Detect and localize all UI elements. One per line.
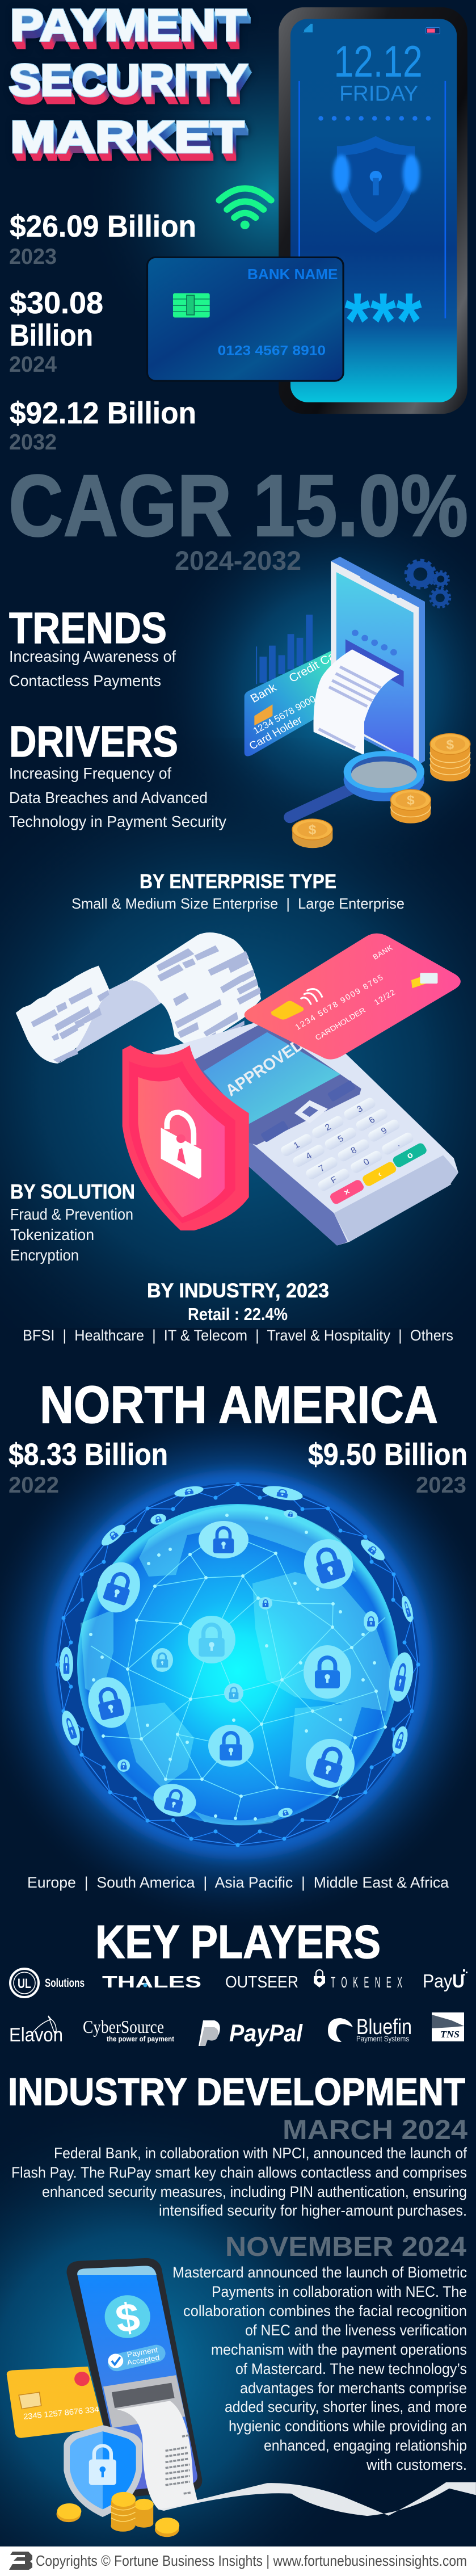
title <box>9 0 247 162</box>
bar chart <box>256 615 313 684</box>
continents <box>81 1505 393 1826</box>
by solution: Tokenization <box>10 1226 94 1243</box>
illustration: smartphone lock screen, wifi and bank card <box>147 7 467 414</box>
credit card: 1234 5678 9009 8765 <box>293 972 386 1032</box>
keypad: 5 <box>336 1134 346 1144</box>
by industry: BFSI | Healthcare | IT & Telecom | Travel & Hospitality | Others <box>23 1327 453 1344</box>
title: PAYMENT <box>10 0 246 50</box>
title: SECURITY <box>9 55 247 105</box>
network lines <box>91 1515 385 1819</box>
keypad: F <box>329 1175 339 1186</box>
keypad: 6 <box>368 1115 377 1125</box>
smartphone: $ <box>113 2295 142 2342</box>
by solution: Fraud & Prevention <box>10 1205 133 1223</box>
logo: Tokenex <box>314 1970 402 1991</box>
smartphone: Accepted <box>127 2354 160 2367</box>
shield with padlock <box>64 2425 142 2517</box>
market size stats: $30.08 <box>10 286 103 320</box>
icon: gold coins <box>57 2492 179 2537</box>
credit card: 1234 5678 9000 <box>251 694 318 736</box>
credit card: CARDHOLDER <box>314 1006 367 1042</box>
regions list: Europe | South America | Asia Pacific | Middle East & Africa <box>27 1874 449 1891</box>
logo: Tokenex: TOKENEX <box>331 1974 402 1991</box>
keypad: 2 <box>323 1122 332 1133</box>
by solution: BY SOLUTION <box>10 1180 135 1203</box>
by enterprise type: Small & Medium Size Enterprise | Large Enterprise <box>71 895 405 912</box>
title: MARKET <box>10 112 244 162</box>
market size stats: $26.09 Billion <box>10 209 196 243</box>
illustration: POS terminal, receipt, shield and card <box>16 932 461 1246</box>
keypad: o <box>405 1150 415 1161</box>
icon: wifi <box>219 188 271 229</box>
logo: UL Solutions: Solutions <box>45 1977 85 1990</box>
magnifying glass <box>290 751 424 817</box>
market size stats: 2032 <box>9 430 57 455</box>
smartphone: FRIDAY <box>339 82 418 106</box>
keypad: 4 <box>304 1151 314 1161</box>
bank card: 0123 4567 8910 <box>218 343 326 358</box>
credit card: Card Holder <box>247 713 304 752</box>
north america stats: 2023 <box>416 1473 466 1498</box>
receipt ribbon <box>158 2482 476 2516</box>
north america stats: $8.33 Billion <box>9 1438 168 1472</box>
November 2024 development: collaboration combines the facial recognition <box>183 2302 467 2319</box>
smartphone: 12.12 <box>334 37 423 86</box>
by solution: Encryption <box>10 1246 79 1264</box>
trends block <box>9 604 176 690</box>
keypad: 8 <box>349 1145 359 1156</box>
smartphone: *** <box>344 276 422 364</box>
logo: PayU: PayU <box>423 1970 465 1991</box>
trends block: TRENDS <box>9 604 167 653</box>
keypad: 1 <box>292 1140 301 1151</box>
logo: PayPal <box>199 2020 303 2047</box>
keypad: . <box>394 1139 402 1149</box>
smartphone <box>67 2258 202 2498</box>
drivers block: DRIVERS <box>9 717 178 766</box>
logo: Elavon: Elavon <box>9 2024 63 2046</box>
shield with padlock <box>123 1045 249 1230</box>
receipt <box>117 2401 198 2510</box>
receipt paper <box>16 932 261 1064</box>
bank card: BANK NAME <box>247 266 338 283</box>
drivers block: Technology in Payment Security <box>9 813 226 830</box>
POS terminal <box>151 1019 458 1246</box>
logo: Outseer: OUTSEER <box>225 1973 298 1991</box>
yellow card: 2345 1257 8676 334 <box>23 2405 99 2422</box>
illustration: payment accepted phone, card, shield, coins and receipt <box>7 2258 476 2537</box>
credit card: BANK <box>371 943 394 961</box>
illustration: isometric mobile payment <box>245 557 470 848</box>
drivers block <box>9 717 226 830</box>
logo: UL Solutions: UL <box>18 1976 31 1991</box>
November 2024 development: NOVEMBER 2024 <box>225 2232 466 2262</box>
by industry: Retail : 22.4% <box>188 1304 288 1324</box>
credit card: Credit Ca <box>287 649 338 685</box>
credit card <box>245 649 338 757</box>
logo: UL Solutions <box>10 1969 85 1997</box>
key players heading: KEY PLAYERS <box>95 1915 381 1968</box>
credit card: 12/22 <box>372 987 397 1007</box>
icon: gears <box>406 561 450 607</box>
by industry: BY INDUSTRY, 2023 <box>147 1280 329 1302</box>
keypad: × <box>342 1187 352 1197</box>
outer network shell <box>57 1484 418 1845</box>
logo: TNS <box>432 2012 464 2041</box>
smartphone <box>331 557 425 767</box>
logo: Bluefin <box>328 2015 412 2043</box>
icon: coin stacks: $ <box>446 738 454 753</box>
logo: CyberSource: the power of payment <box>107 2035 175 2043</box>
March 2024 development <box>11 2115 467 2219</box>
yellow card <box>7 2367 104 2438</box>
footer <box>0 2546 476 2576</box>
CAGR heading: 2024-2032 <box>175 545 301 575</box>
padlock nodes <box>58 1484 416 1821</box>
north america heading: NORTH AMERICA <box>40 1375 438 1434</box>
keypad: 3 <box>355 1104 365 1115</box>
bank card <box>147 257 343 381</box>
by solution <box>10 1180 135 1264</box>
by enterprise type <box>71 871 405 912</box>
keypad: ‹ <box>376 1170 384 1179</box>
keypad <box>279 1096 428 1205</box>
keypad: 7 <box>317 1163 327 1174</box>
logo: Fortune Business Insights <box>9 2552 32 2570</box>
icon: coin stacks: $ <box>407 793 415 808</box>
receipt <box>314 649 399 755</box>
icon: coin stacks <box>292 734 470 848</box>
March 2024 development: MARCH 2024 <box>283 2115 467 2145</box>
key player logos <box>9 1969 467 2047</box>
November 2024 development <box>172 2232 467 2473</box>
market size stats: Billion <box>10 318 93 352</box>
logo: Bluefin: Payment Systems <box>356 2034 409 2043</box>
north america stats: 2022 <box>9 1473 59 1498</box>
by enterprise type: BY ENTERPRISE TYPE <box>140 871 336 893</box>
icon: coin stacks: $ <box>309 823 317 838</box>
keypad: 0 <box>362 1157 372 1167</box>
November 2024 development: with customers. <box>366 2456 467 2473</box>
credit card: Bank <box>248 681 279 705</box>
trends block: Increasing Awareness of <box>9 648 176 665</box>
logo: Elavon <box>9 2016 63 2046</box>
illustration: secure digital globe <box>53 1480 422 1849</box>
north america stats <box>9 1438 467 1498</box>
market size stats <box>9 209 196 455</box>
trends block: Contactless Payments <box>9 672 161 690</box>
logo: Thales <box>102 1973 201 1991</box>
by industry <box>23 1280 453 1344</box>
market size stats: 2023 <box>9 245 57 269</box>
drivers block: Increasing Frequency of <box>9 764 171 782</box>
market size stats: 2024 <box>9 352 57 377</box>
logo: TNS: TNS <box>440 2029 460 2040</box>
logo: CyberSource: CyberSource <box>83 2016 164 2037</box>
logo: Thales: THALES <box>102 1973 201 1991</box>
smartphone <box>279 7 467 414</box>
drivers block: Data Breaches and Advanced <box>9 789 208 806</box>
POS terminal: APPROVED <box>222 1036 307 1100</box>
market size stats: $92.12 Billion <box>10 396 196 430</box>
smartphone: Payment <box>127 2346 159 2359</box>
keypad: 9 <box>380 1125 389 1136</box>
logo: PayPal: PayPal <box>229 2020 303 2047</box>
logo: Bluefin: Bluefin <box>356 2015 412 2039</box>
credit card <box>245 934 461 1060</box>
